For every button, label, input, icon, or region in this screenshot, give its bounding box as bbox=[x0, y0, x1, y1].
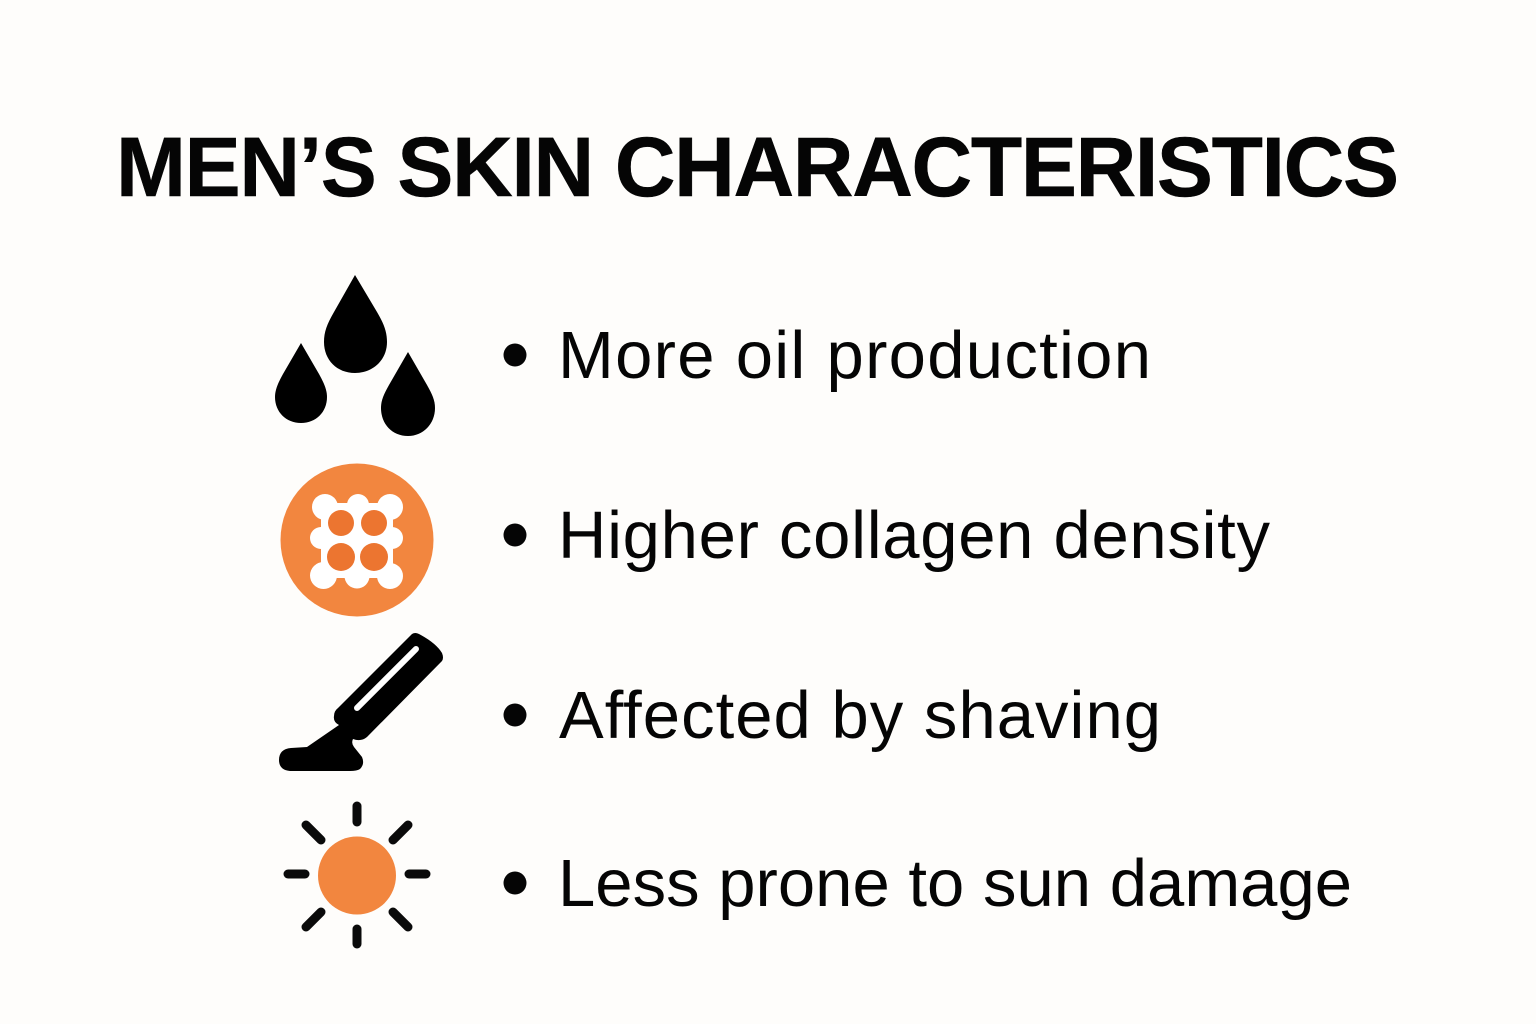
bullet: less prone to sun damage: Less prone to sun damage bbox=[558, 846, 1352, 921]
bullet: more oil production: More oil production bbox=[558, 318, 1151, 393]
icon: razor bbox=[279, 633, 443, 771]
bullet: affected by shaving: Affected by shaving bbox=[559, 678, 1161, 753]
bullet: higher collagen density: Higher collagen density bbox=[558, 498, 1270, 573]
icon: oil drops bbox=[275, 275, 435, 436]
title: MEN’S SKIN CHARACTERISTICS bbox=[116, 120, 1399, 214]
icon: sun bbox=[288, 806, 426, 944]
icon: collagen grid bbox=[280, 464, 434, 616]
